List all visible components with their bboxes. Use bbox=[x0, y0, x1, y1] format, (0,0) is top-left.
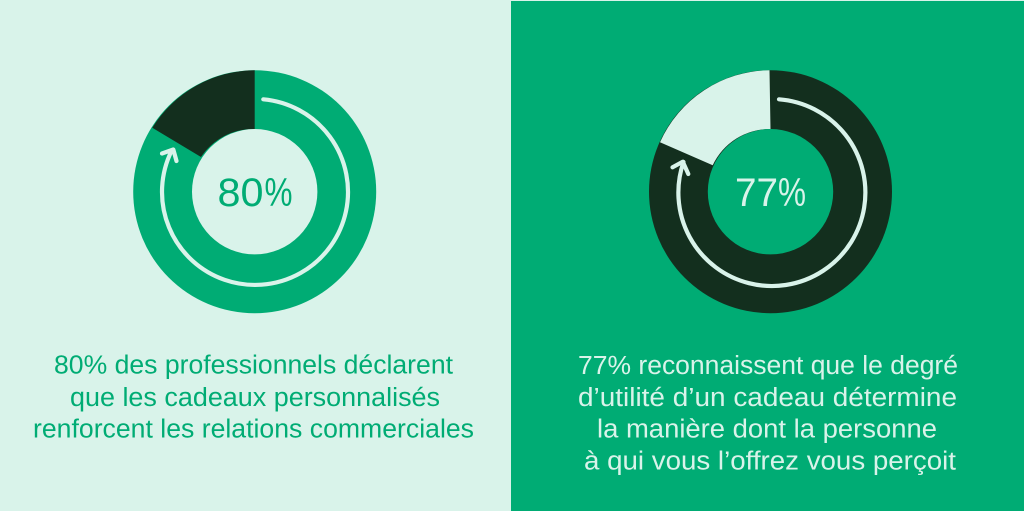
value: 80% bbox=[218, 171, 292, 215]
value: 80%: % bbox=[264, 171, 292, 215]
arrow: circular clockwise bbox=[672, 99, 865, 286]
text block: left caption: que les cadeaux personnalisés bbox=[70, 384, 440, 412]
donut chart: 80% bbox=[133, 70, 376, 313]
value: 77%: % bbox=[778, 171, 806, 215]
text block: right caption: d’utilité d’un cadeau détermine bbox=[578, 384, 957, 412]
value: 77% bbox=[735, 171, 806, 215]
text block: right caption: à qui vous l’offrez vous perçoit bbox=[584, 447, 956, 475]
panel: right background bbox=[511, 1, 1024, 511]
donut chart: 77% bbox=[649, 70, 892, 313]
arrow: circular clockwise bbox=[162, 99, 348, 285]
text block: right caption: la manière dont la personne bbox=[597, 416, 937, 444]
value: 80%: 80 bbox=[218, 171, 264, 215]
text block: left caption: renforcent les relations commerciales bbox=[33, 416, 474, 444]
panel: left 80% bbox=[33, 70, 474, 444]
text block: right caption bbox=[578, 352, 958, 475]
text block: left caption: 80% des professionnels déclarent bbox=[54, 352, 453, 380]
panel: right 77% bbox=[578, 70, 958, 475]
text block: right caption: 77% reconnaissent que le degré bbox=[578, 352, 958, 380]
text block: left caption bbox=[33, 352, 474, 444]
value: 77%: 77 bbox=[735, 171, 778, 215]
